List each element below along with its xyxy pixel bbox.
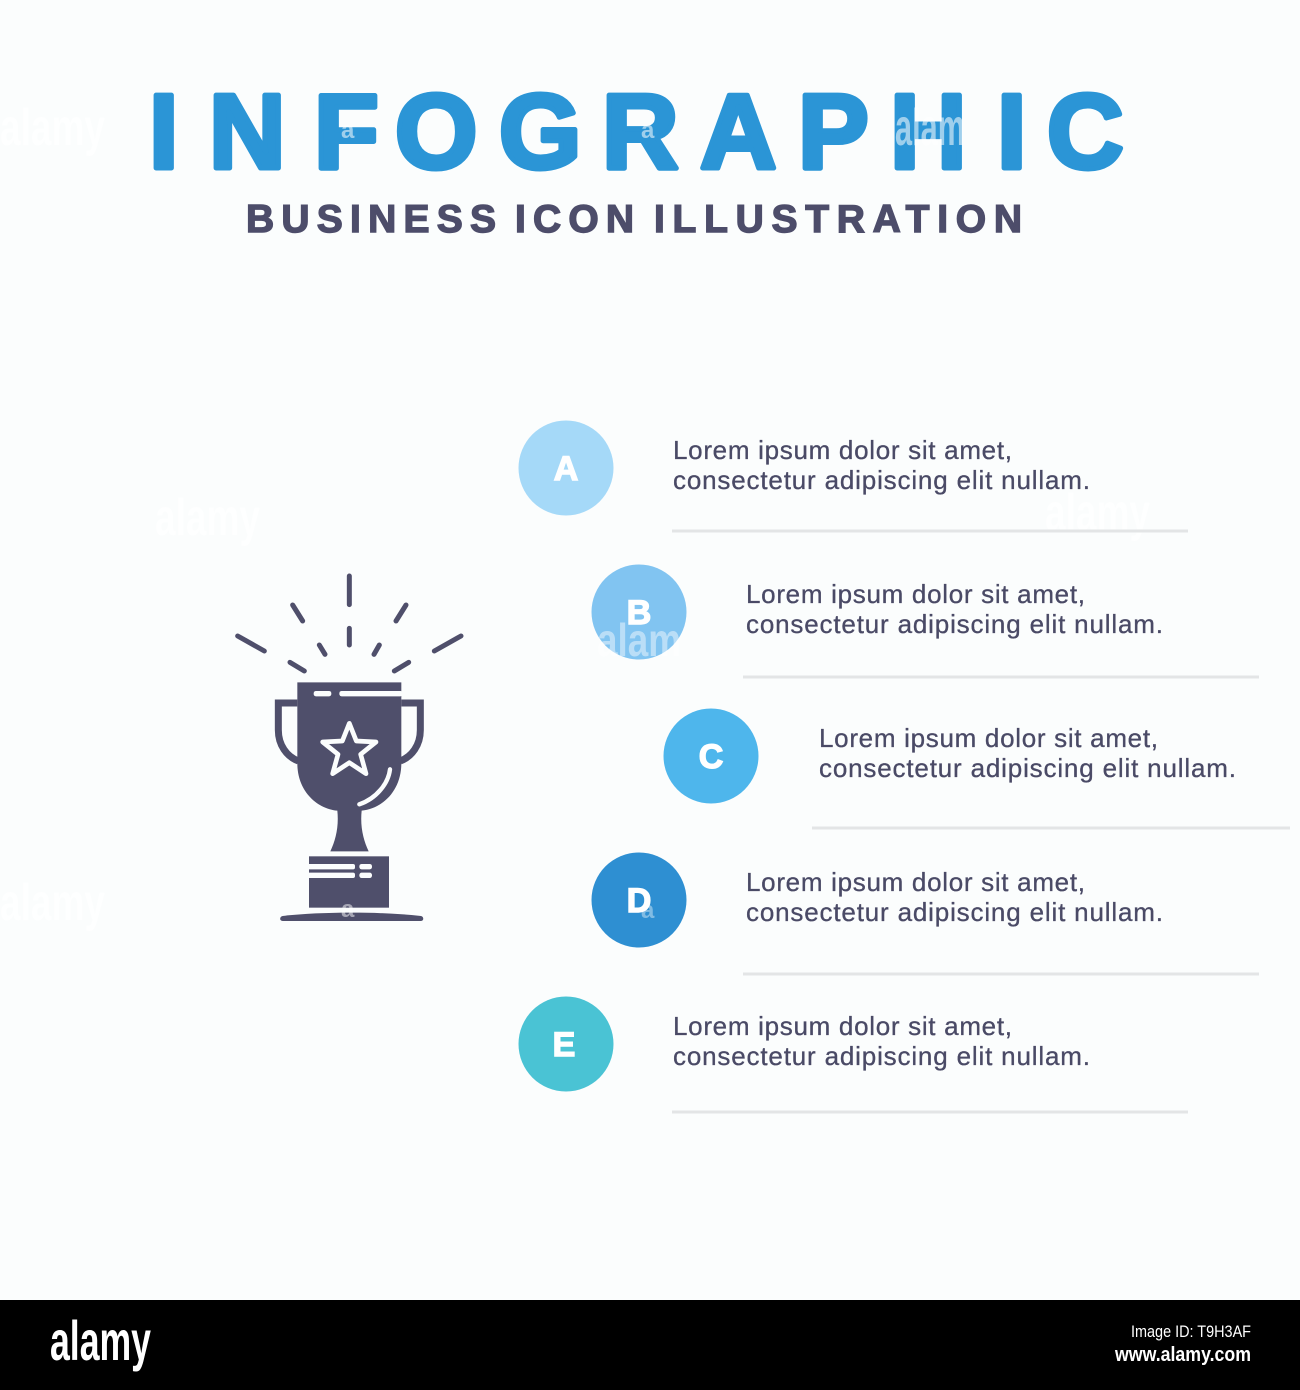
text B: Lorem ipsum dolor sit amet, — [746, 579, 1085, 609]
footer logo: alamy — [50, 1309, 151, 1372]
faint background watermarks: alamy — [1045, 484, 1150, 542]
subtitle: ICON — [515, 198, 634, 241]
text C: consectetur adipiscing elit nullam. — [819, 753, 1236, 783]
subtitle: ILLUSTRATION — [654, 198, 1022, 241]
text B: consectetur adipiscing elit nullam. — [746, 609, 1163, 639]
faint background watermarks: alamy — [155, 489, 260, 547]
circle A — [518, 420, 614, 516]
icon: trophy cup — [278, 682, 420, 851]
step C — [664, 708, 1290, 830]
subtitle — [246, 198, 1022, 241]
text E: consectetur adipiscing elit nullam. — [673, 1041, 1090, 1071]
watermarks over artwork: a — [341, 117, 355, 144]
faint background watermarks: alamy — [0, 874, 105, 932]
circle B — [592, 564, 686, 660]
letter C: C — [699, 738, 723, 776]
text C: Lorem ipsum dolor sit amet, — [819, 723, 1158, 753]
icon: trophy with rays — [238, 576, 461, 921]
letter B: B — [627, 594, 651, 632]
icon: trophy base — [280, 856, 423, 921]
circle C — [664, 708, 758, 804]
watermarks over artwork: a — [341, 896, 355, 923]
subtitle: BUSINESS — [246, 198, 496, 241]
step D — [592, 852, 1259, 976]
text A: consectetur adipiscing elit nullam. — [673, 465, 1090, 495]
icon: light rays — [238, 576, 461, 671]
faint background watermarks — [0, 99, 1150, 932]
letter A: A — [554, 450, 578, 488]
text E: Lorem ipsum dolor sit amet, — [673, 1011, 1012, 1041]
step A — [518, 420, 1188, 532]
website: www.alamy.com — [1114, 1344, 1251, 1366]
text D: Lorem ipsum dolor sit amet, — [746, 867, 1085, 897]
step E — [518, 996, 1188, 1114]
watermarks over artwork: a — [641, 117, 655, 144]
letter E: E — [553, 1026, 575, 1064]
letter D: D — [627, 882, 651, 920]
watermarks over artwork — [341, 99, 965, 924]
circle E — [518, 996, 614, 1092]
footer bar — [0, 1300, 1300, 1390]
circle D — [592, 852, 686, 948]
image id: Image ID: T9H3AF — [1131, 1322, 1251, 1341]
step B — [592, 564, 1259, 678]
text A: Lorem ipsum dolor sit amet, — [673, 435, 1012, 465]
watermark over circle B: alam — [597, 614, 681, 666]
watermarks over artwork: alam — [895, 99, 965, 157]
text D: consectetur adipiscing elit nullam. — [746, 897, 1163, 927]
watermarks over artwork: a — [641, 897, 655, 924]
faint background watermarks: alamy — [0, 99, 105, 157]
title: INFOGRAPHIC — [149, 73, 1124, 191]
